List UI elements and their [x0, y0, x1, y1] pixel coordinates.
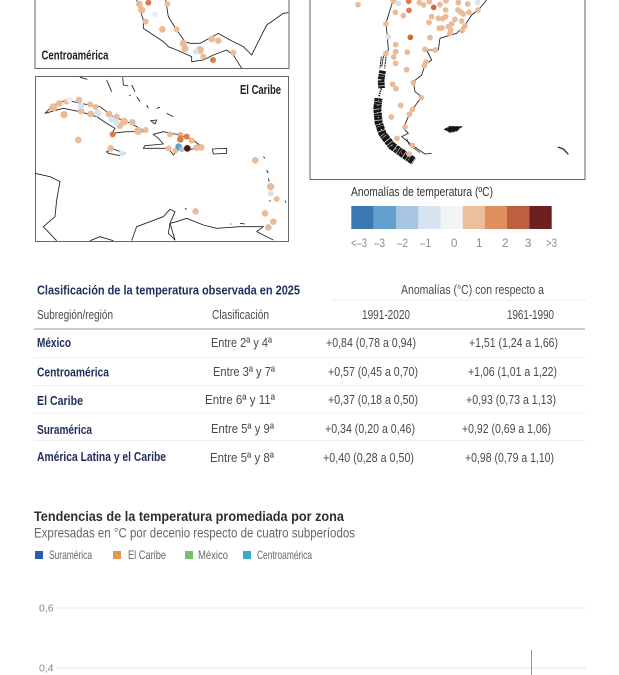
row: Suramérica: +0,92 (0,69 a 1,06) — [462, 422, 551, 436]
chart: trends axis and gridlines: 0,4 — [39, 662, 54, 674]
row: América Latina y el Caribe — [37, 450, 554, 465]
legend: anomalías de temperatura: 3 — [525, 238, 531, 250]
legend: anomalías de temperatura: <–3 — [351, 238, 367, 250]
table title: Clasificación de la temperatura observada en 2025 — [37, 284, 300, 298]
legend: anomalías de temperatura: –3 — [374, 238, 385, 250]
panel: El Caribe map — [35, 76, 288, 242]
legend: anomalías de temperatura: >3 — [546, 238, 557, 250]
chart legend: Suramérica — [49, 548, 92, 562]
row: Centroamérica: Centroamérica — [37, 366, 110, 380]
row: América Latina y el Caribe: Entre 5ª y 8ª — [210, 451, 274, 465]
row: Suramérica: Suramérica — [37, 423, 93, 437]
chart legend: El Caribe — [128, 548, 166, 562]
row: México — [37, 336, 558, 350]
row: América Latina y el Caribe: +0,98 (0,79 a 1,10) — [465, 451, 554, 465]
row: América Latina y el Caribe: América Latina y el Caribe — [37, 450, 166, 464]
label: El Caribe: El Caribe — [240, 82, 281, 97]
row: Centroamérica — [37, 365, 557, 380]
row: El Caribe: +0,93 (0,73 a 1,13) — [466, 393, 556, 407]
legend: anomalías de temperatura: 1 — [476, 238, 482, 250]
legend: anomalías de temperatura: Anomalías de temperatura (ºC) — [351, 184, 493, 199]
row: México: México — [37, 336, 71, 350]
table column group heading: Anomalías (°C) con respecto a — [401, 283, 544, 297]
chart legend: México — [198, 548, 228, 562]
table header row — [37, 308, 554, 322]
legend: anomalías de temperatura: 0 — [451, 238, 457, 250]
row: América Latina y el Caribe: +0,40 (0,28 a 0,50) — [323, 451, 414, 465]
panel: Centroamérica map — [35, 0, 289, 68]
chart: trends axis and gridlines — [39, 602, 586, 675]
table: clasificación de la temperatura — [34, 283, 586, 465]
legend: anomalías de temperatura: –1 — [420, 238, 431, 250]
legend: anomalías de temperatura: 2 — [502, 238, 508, 250]
row: El Caribe: El Caribe — [37, 394, 83, 408]
row: El Caribe: +0,37 (0,18 a 0,50) — [328, 393, 418, 407]
chart subtitle: Expresadas en °C por decenio respecto de cuatro subperíodos — [34, 526, 355, 540]
legend: anomalías de temperatura — [351, 184, 557, 250]
row: El Caribe — [37, 393, 556, 408]
row: México: +0,84 (0,78 a 0,94) — [326, 336, 416, 350]
row: Centroamérica: Entre 3ª y 7ª — [213, 365, 275, 379]
chart legend — [35, 548, 312, 562]
row: Centroamérica: +1,06 (1,01 a 1,22) — [468, 365, 557, 379]
table header row: Subregión/región — [37, 308, 113, 322]
table header row: 1991-2020 — [362, 308, 410, 322]
table header row: 1961-1990 — [507, 308, 554, 322]
row: Suramérica: Entre 5ª y 9ª — [211, 422, 274, 436]
table header row: Clasificación — [212, 308, 269, 322]
chart legend: Centroamérica — [257, 548, 312, 562]
row: El Caribe: Entre 6ª y 11ª — [205, 393, 275, 407]
label: Centroamérica: Centroamérica — [42, 48, 109, 62]
legend: anomalías de temperatura: –2 — [397, 238, 408, 250]
row: México: Entre 2ª y 4ª — [211, 336, 272, 350]
panel: Suramérica map — [310, 0, 585, 180]
row: Suramérica — [37, 422, 551, 437]
row: Suramérica: +0,34 (0,20 a 0,46) — [325, 422, 415, 436]
row: México: +1,51 (1,24 a 1,66) — [469, 336, 558, 350]
chart: trends axis and gridlines: 0,6 — [39, 602, 54, 614]
chart heading: Tendencias de la temperatura promediada por zona — [34, 508, 344, 524]
row: Centroamérica: +0,57 (0,45 a 0,70) — [328, 365, 418, 379]
